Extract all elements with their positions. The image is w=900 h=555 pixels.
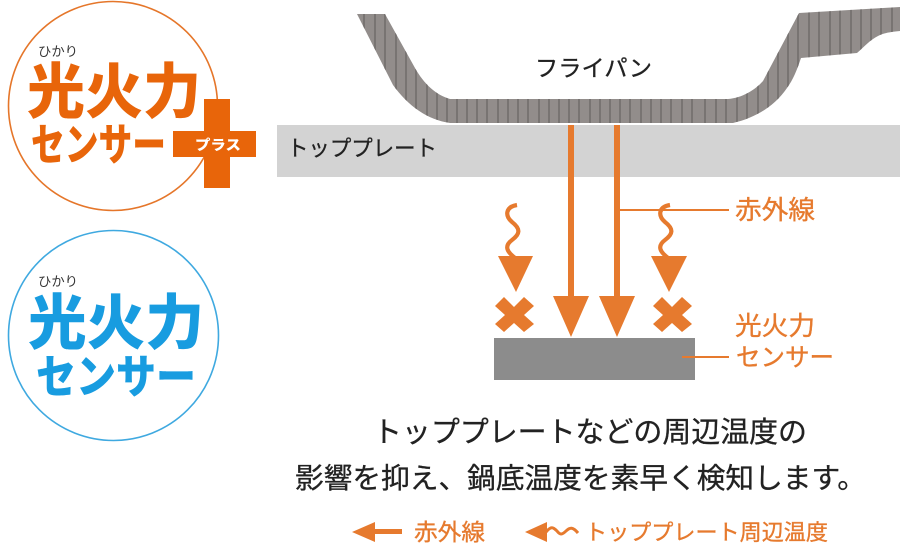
description text: トッププレートなどの周辺温度の [373, 416, 807, 449]
callout: sensor [682, 311, 834, 372]
frying pan label: フライパン [535, 55, 652, 81]
infrared label: 赤外線 [735, 195, 815, 225]
badge heading: light power: 光火力 [27, 59, 201, 126]
top plate label: トッププレート [287, 136, 437, 161]
plus label: プラス [195, 137, 241, 153]
badge heading: sensor: センサー [31, 121, 166, 170]
description text: 影響を抑え、鍋底温度を素早く検知します。 [295, 463, 866, 495]
icon: plus cross [173, 99, 256, 188]
sensor label line two: センサー [736, 344, 834, 372]
legend: infrared [352, 519, 485, 545]
blue badge heading: light power: 光火力 [28, 290, 204, 357]
cross mark left [495, 297, 534, 332]
blue badge heading: sensor: センサー [36, 351, 196, 403]
top plate [277, 125, 900, 177]
legend label: infrared: 赤外線 [414, 519, 485, 545]
wavy arrow: blocked left [498, 205, 533, 292]
blue badge small label: hikari: ひかり [38, 274, 78, 289]
arrow: infrared left [553, 125, 589, 337]
description text [295, 416, 866, 495]
legend label: top plate ambient temperature: トッププレート周辺温度 [585, 520, 828, 545]
badge small label: hikari: ひかり [38, 44, 78, 59]
legend: top plate ambient temperature [525, 520, 828, 545]
sensor label line one: 光火力 [735, 311, 815, 341]
badge: blue light-power sensor [8, 230, 218, 440]
sensor block [494, 338, 695, 380]
frying pan cross-section [357, 7, 900, 123]
wavy arrow: blocked right [651, 205, 687, 292]
arrow: infrared right [599, 125, 635, 337]
badge: orange light-power sensor plus [8, 2, 256, 210]
cross mark right [653, 297, 692, 332]
